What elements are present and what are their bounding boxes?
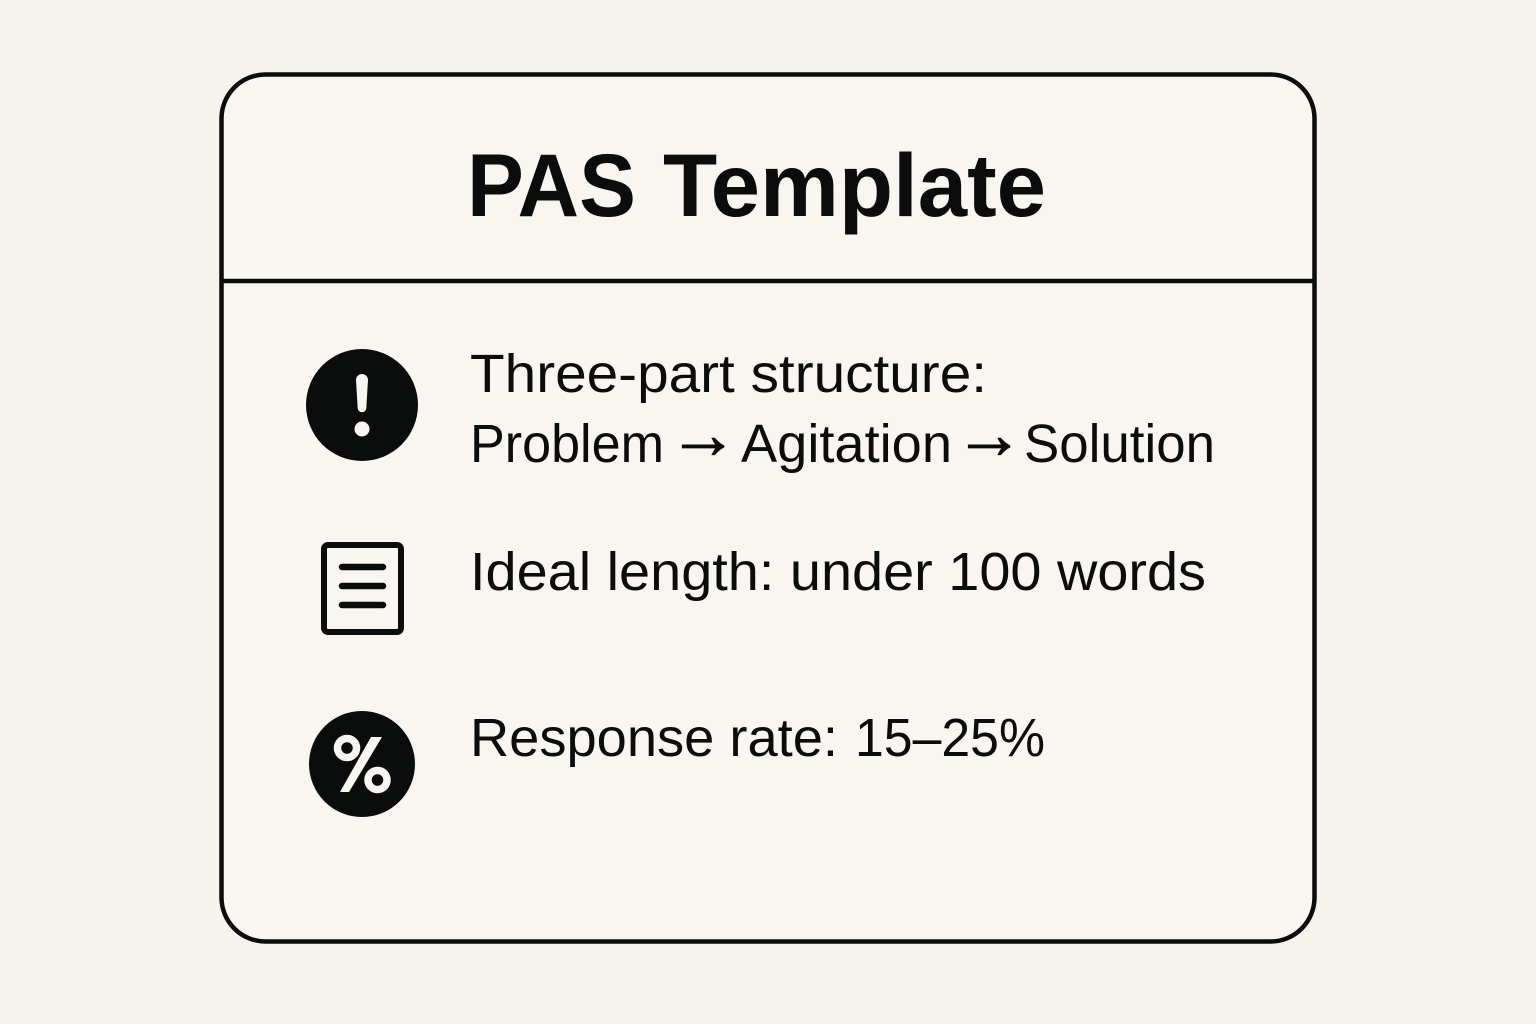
text: response rate: 15–25% <box>855 708 1045 768</box>
icon: exclamation circle <box>306 349 418 461</box>
icon: percent circle <box>309 711 415 817</box>
text: response rate <box>470 708 1045 768</box>
text: three-part structure: Problem <box>470 414 664 474</box>
text: three-part structure: → <box>668 395 738 473</box>
icon: document <box>324 545 401 632</box>
panel: PAS template card <box>222 74 1314 942</box>
title <box>467 135 1046 235</box>
text: three-part structure: → <box>954 395 1024 473</box>
text: three-part structure <box>470 344 1215 474</box>
title: Template <box>663 135 1046 235</box>
text: three-part structure: Three-part structure: <box>470 344 987 404</box>
text: response rate: Response rate: <box>470 708 838 768</box>
text: ideal length: Ideal length: under 100 words <box>470 542 1206 602</box>
title: PAS <box>467 135 636 235</box>
text: three-part structure: Agitation <box>741 414 952 474</box>
text: three-part structure: Solution <box>1024 414 1215 474</box>
